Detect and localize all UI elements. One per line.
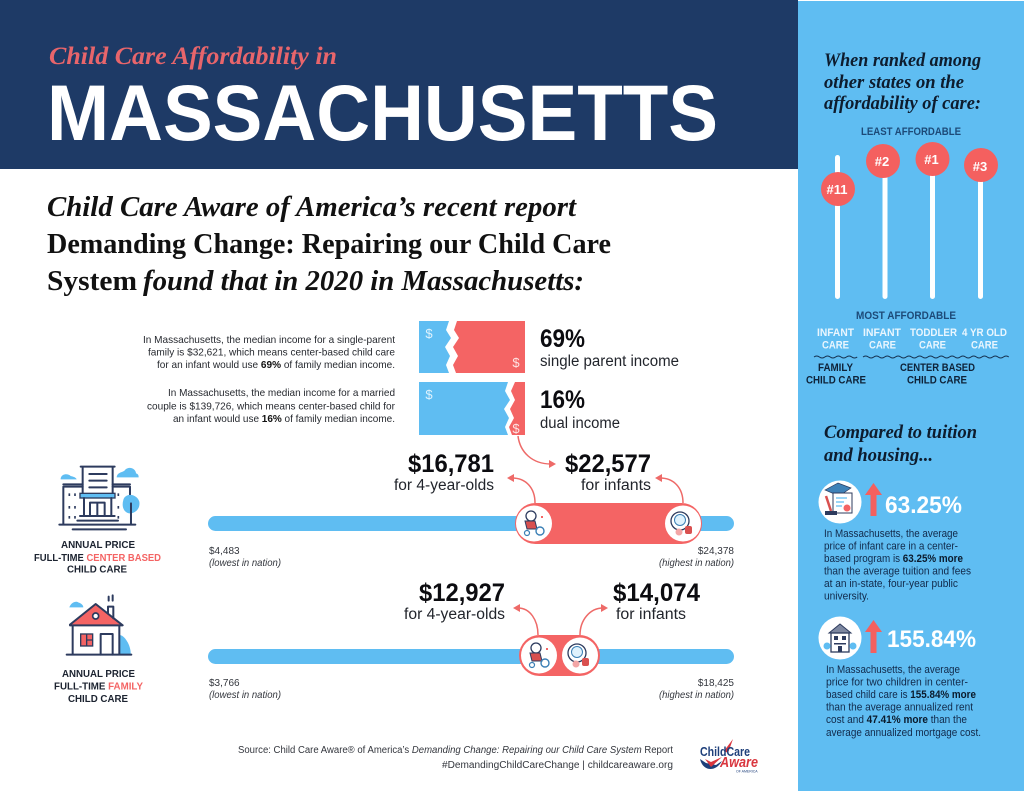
center based price: lowest: (lowest in nation) [209, 558, 281, 569]
family price: highest [659, 678, 734, 701]
text block: tuition comparison: based program is 63.25% more [824, 553, 963, 565]
sidebar heading: tuition and housing [824, 422, 977, 466]
text block: housing comparison [826, 664, 981, 739]
icon: diploma and cap [818, 480, 862, 524]
logo: Child Care Aware: Aware [719, 754, 758, 771]
center based price: values: $16,781 [408, 450, 494, 478]
text block: housing comparison: than the average annualized rent [826, 702, 973, 714]
text block: tuition comparison: than the average tuition and fees [824, 566, 972, 578]
family price: highest: (highest in nation) [659, 690, 734, 701]
slider chart: rankings [821, 142, 998, 299]
family price: values: $14,074 [613, 579, 700, 607]
icon: family home [67, 595, 131, 655]
logo: Child Care Aware [700, 739, 758, 774]
main heading: System [47, 266, 137, 297]
stat: 69 percent: 69% [540, 325, 585, 353]
center based price: values [394, 450, 651, 494]
source footer: #DemandingChildCareChange | childcareaware.org [442, 760, 673, 771]
stat: 155.84 percent: 155.84% [887, 626, 976, 653]
center based price: values: for 4-year-olds [394, 477, 494, 494]
bar: single parent income share: $ [425, 326, 433, 341]
panel: right sidebar [798, 1, 1024, 791]
group label: family child care: FAMILY [818, 362, 854, 374]
column labels: CARE [869, 340, 896, 352]
marker: toddler rank 1: #1 [924, 152, 939, 167]
header state name: MASSACHUSETTS [47, 68, 718, 157]
arrow up: tuition [865, 483, 882, 516]
group label: family child care: CHILD CARE [806, 374, 866, 386]
family price: lowest: (lowest in nation) [209, 690, 281, 701]
center based price: highest: (highest in nation) [659, 558, 734, 569]
stat: 16 percent [540, 386, 620, 432]
icon: child on tricycle [521, 638, 557, 674]
arrow up: housing [865, 620, 882, 653]
center based price: lowest: $4,483 [209, 546, 240, 557]
arrow: dual income to infant price [518, 436, 556, 468]
stat: 63.25 percent: 63.25% [885, 492, 962, 519]
label: center based child care [34, 540, 161, 576]
label: center based child care: CHILD CARE [67, 564, 127, 576]
text block: single parent income: for an infant would use 69% of family median income. [157, 360, 395, 371]
source footer: Source: Child Care Aware® of America’s Demanding Change: Repairing our Child Care System Report [238, 745, 673, 756]
column labels: CARE [919, 340, 946, 352]
column labels: CARE [822, 340, 849, 352]
column labels: 4 YR OLD [962, 327, 1007, 339]
marker: center infant rank 2: #2 [875, 154, 889, 169]
source footer [238, 745, 673, 771]
family price: highest: $18,425 [698, 678, 734, 689]
text block: tuition comparison: In Massachusetts, the average [824, 528, 958, 540]
center based price: highest: $24,378 [698, 546, 734, 557]
center based price: values: $22,577 [565, 450, 651, 478]
sidebar heading: ranking: affordability of care: [824, 93, 981, 114]
center based price: range chart [208, 474, 734, 544]
family price: values: $12,927 [419, 579, 505, 607]
column labels: INFANT [863, 327, 901, 339]
family arrows [513, 604, 608, 635]
label: family child care: FULL-TIME FAMILY [54, 682, 143, 692]
icon: house [818, 616, 862, 660]
main heading [47, 192, 611, 297]
text block: housing comparison: based child care is 155.84% more [826, 689, 976, 701]
marker: family infant rank 11: #11 [827, 182, 847, 197]
family price: values: for 4-year-olds [404, 606, 505, 623]
family price: lowest [209, 678, 281, 701]
text block: tuition comparison [824, 528, 972, 602]
text block: married couple income [147, 388, 396, 425]
icon: center building [59, 467, 139, 529]
label: family child care: ANNUAL PRICE [62, 669, 135, 680]
stat: 16 percent: 16% [540, 386, 585, 414]
main heading: Child Care Aware of America’s recent report [47, 192, 577, 223]
family price: range chart [208, 604, 734, 676]
center based price: highest [659, 546, 734, 569]
marker: family infant rank 11 [821, 172, 855, 206]
text block: single parent income: family is $32,621, which means center-based child care [148, 348, 395, 358]
column labels: TODDLER [910, 327, 957, 339]
group label: family child care [806, 362, 866, 386]
text block: housing comparison: In Massachusetts, the average [826, 664, 960, 676]
label: center based child care: FULL-TIME CENTER BASED [34, 553, 161, 564]
bar: dual income share: $ [512, 421, 520, 436]
icon: baby [562, 638, 598, 674]
marker: center infant rank 2 [866, 144, 900, 178]
text block: married couple income: couple is $139,726, which means center-based child for [147, 402, 396, 412]
bar: single parent income share: $ [512, 355, 520, 370]
stat: 16 percent: dual income [540, 415, 620, 432]
group label: center based child care [900, 362, 975, 386]
main heading: found that in 2020 in Massachusetts: [143, 266, 584, 297]
stat: 69 percent [540, 325, 679, 370]
marker: toddler rank 1 [916, 142, 950, 176]
icon: child on tricycle [516, 506, 552, 542]
marker: 4 year old rank 3 [964, 148, 998, 182]
family price: lowest: $3,766 [209, 678, 240, 689]
sidebar heading: ranking: other states on the [824, 72, 965, 93]
text block: tuition comparison: university. [824, 590, 869, 602]
family price: values [404, 579, 700, 623]
header banner [0, 0, 798, 169]
family price: values: for infants [616, 606, 686, 623]
group label: center based child care: CHILD CARE [907, 374, 967, 386]
logo: Child Care Aware: OF AMERICA [736, 770, 758, 774]
text block: single parent income: In Massachusetts, the median income for a single-parent [143, 335, 395, 346]
logo: Child Care Aware: ChildCare [700, 745, 750, 759]
bar: single parent income share [419, 321, 525, 373]
text block: tuition comparison: at an in-state, four-year public [824, 578, 959, 590]
text block: married couple income: an infant would use 16% of family median income. [173, 414, 395, 425]
column labels: INFANT [817, 327, 854, 339]
text block: tuition comparison: price of infant care in a center- [824, 540, 958, 552]
group label: center based child care: CENTER BASED [900, 362, 975, 374]
marker: 4 year old rank 3: #3 [973, 159, 987, 174]
center based price: lowest [209, 546, 281, 569]
label: most affordable: MOST AFFORDABLE [856, 310, 956, 322]
column labels [817, 327, 1007, 352]
text block: single parent income [143, 335, 395, 371]
bar: dual income share: $ [425, 387, 433, 402]
stat: 69 percent: single parent income [540, 353, 679, 370]
bar: dual income share [419, 382, 525, 436]
center based arrows [507, 474, 683, 503]
label: center based child care: ANNUAL PRICE [61, 540, 135, 551]
label: family child care [54, 669, 143, 705]
sidebar heading: ranking: When ranked among [824, 50, 981, 71]
text block: housing comparison: average annualized mortgage cost. [826, 727, 981, 739]
label: least affordable: LEAST AFFORDABLE [861, 126, 961, 138]
center based price: values: for infants [581, 477, 651, 494]
text block: housing comparison: cost and 47.41% more than the [826, 714, 967, 726]
header subtitle: Child Care Affordability in [49, 43, 337, 70]
sidebar heading: tuition and housing: Compared to tuition [824, 422, 977, 443]
sidebar heading: tuition and housing: and housing... [824, 445, 933, 466]
text block: married couple income: In Massachusetts, the median income for a married [168, 388, 395, 399]
label: family child care: CHILD CARE [68, 694, 128, 705]
icon: baby [665, 506, 701, 542]
main heading: Demanding Change: Repairing our Child Care [47, 229, 611, 260]
column labels: CARE [971, 340, 998, 352]
sidebar heading: ranking [824, 50, 981, 114]
text block: housing comparison: price for two children in center- [826, 677, 968, 689]
wavy brackets [814, 356, 1009, 358]
